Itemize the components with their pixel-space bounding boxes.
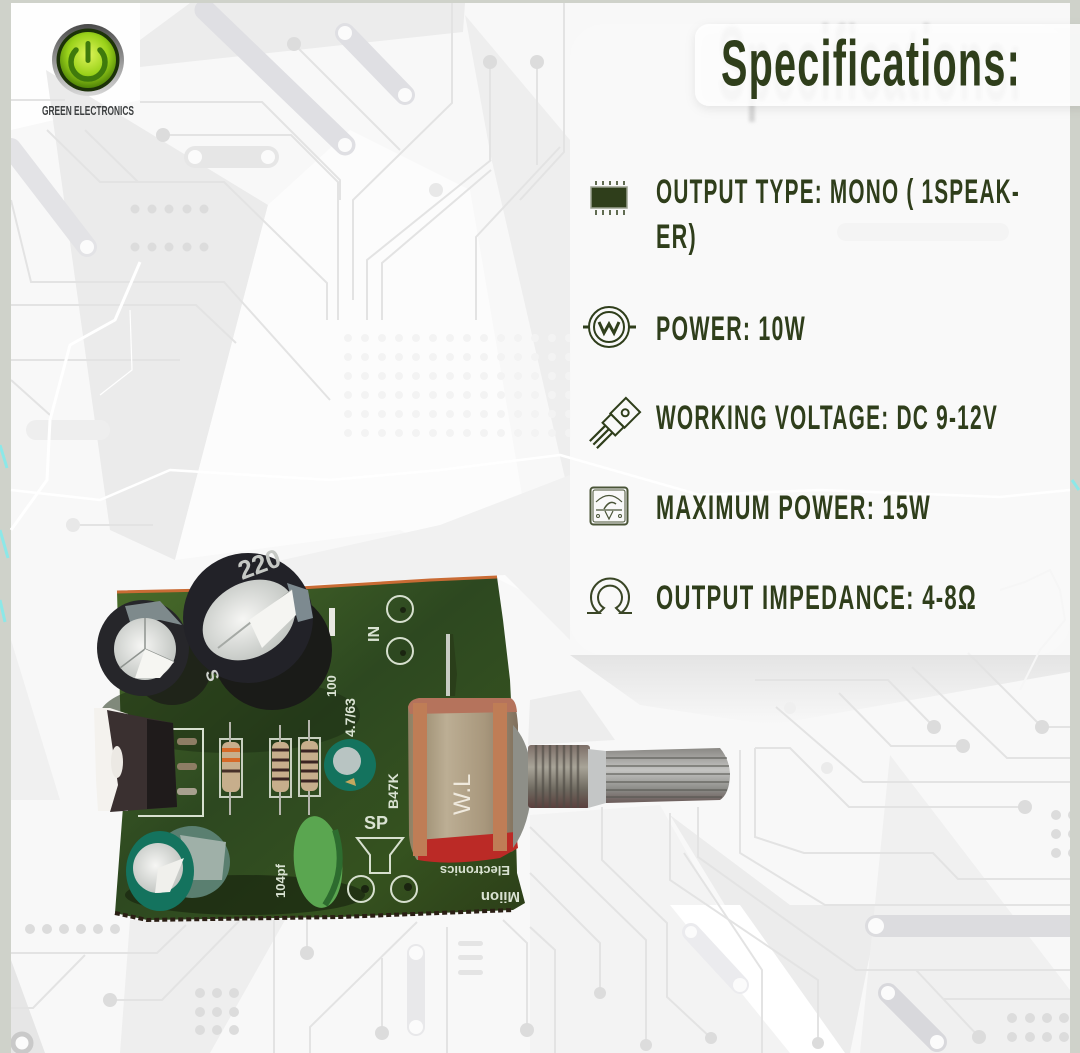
- spec: power: [583, 307, 806, 348]
- circuit board: Miion: [481, 888, 520, 905]
- circuit board: IN: [366, 626, 383, 642]
- spec list: [583, 173, 1020, 617]
- spec: output type: [591, 173, 1020, 256]
- spec: output type: ER): [656, 218, 697, 256]
- icon: wattmeter: [583, 307, 636, 347]
- spec: working voltage: [586, 398, 998, 452]
- circuit board: 100: [324, 675, 339, 697]
- icon: transistor: [586, 398, 640, 452]
- potentiometer shaft: [528, 745, 730, 808]
- large capacitor: [183, 543, 332, 710]
- large capacitor: S: [201, 667, 223, 684]
- icon: omega: [587, 579, 632, 613]
- voltage regulator: [94, 708, 197, 812]
- spec: maximum power: [590, 488, 931, 527]
- icon: chip: [591, 181, 627, 215]
- resistors: [220, 720, 320, 815]
- circuit board: Electronics: [440, 863, 510, 878]
- logo: Green Electronics: [42, 24, 134, 118]
- potentiometer: W.L: [449, 774, 476, 815]
- teal capacitor: [126, 826, 230, 911]
- spec text: power: POWER: 10W: [656, 310, 806, 348]
- icon: analog meter: [590, 488, 628, 524]
- circuit board: [100, 577, 525, 920]
- spec: output impedance: [587, 579, 977, 617]
- ceramic capacitor: [289, 814, 347, 910]
- circuit board: 104pf: [273, 863, 288, 898]
- circuit board: 4.7/63: [342, 698, 358, 737]
- circuit board: B47K: [385, 773, 401, 809]
- icon: power button: [52, 24, 124, 96]
- small capacitor: [97, 600, 212, 705]
- large capacitor: 220: [234, 543, 285, 586]
- potentiometer: [408, 698, 532, 863]
- panel: specifications backdrop: [570, 24, 1070, 655]
- circuit board: SP: [364, 813, 388, 833]
- lightning strokes: [11, 262, 1070, 690]
- product photo: amplifier board: [94, 543, 730, 920]
- logo wordmark: GREEN ELECTRONICS: [42, 104, 134, 118]
- small teal capacitor: [324, 739, 376, 791]
- spec text: maximum power: MAXIMUM POWER: 15W: [656, 489, 931, 527]
